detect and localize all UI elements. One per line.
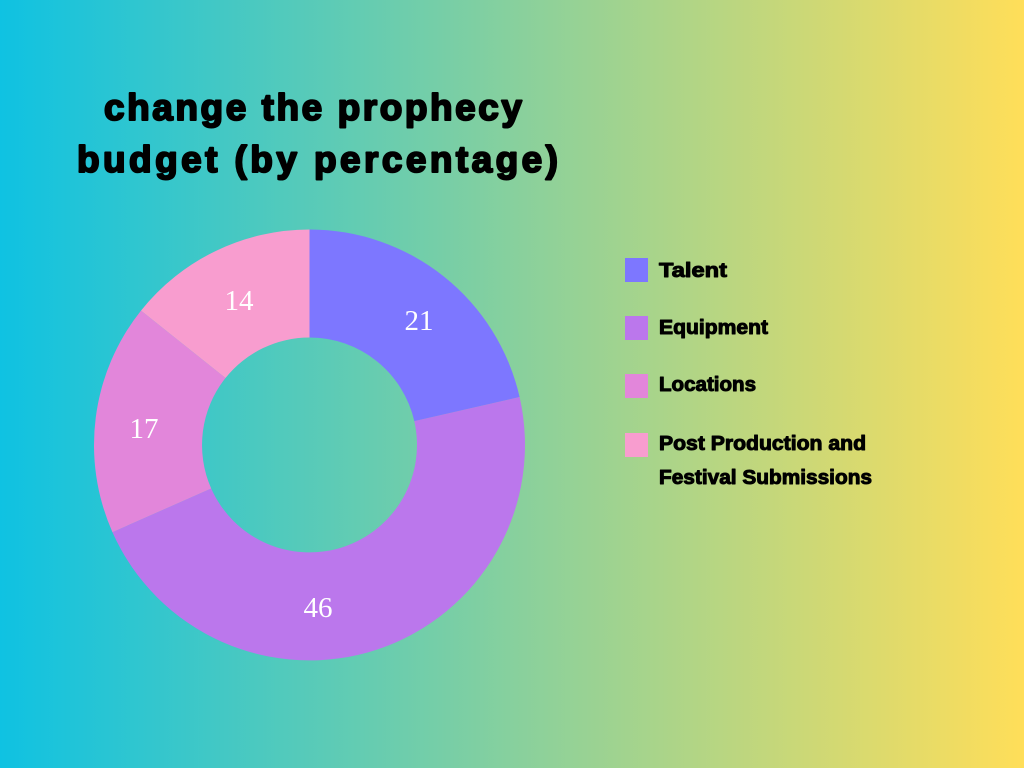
value: 14: 14 xyxy=(224,285,254,317)
value: 21: 21 xyxy=(404,305,434,337)
legend item: Post Production and Festival Submissions xyxy=(625,433,872,489)
title: change the prophecy xyxy=(104,87,522,128)
legend xyxy=(625,258,872,489)
legend item: Equipment xyxy=(625,316,768,340)
slice: Post Production 14 xyxy=(141,230,310,378)
legend item: Locations xyxy=(625,374,756,398)
legend item: Locations: Locations xyxy=(659,374,756,396)
donut chart xyxy=(94,230,525,660)
slice: Locations 17 xyxy=(94,311,226,532)
legend item: Post Production and Festival Submissions: Post Production and xyxy=(659,433,866,455)
legend item: Equipment: Equipment xyxy=(659,317,768,339)
title: budget (by percentage) xyxy=(77,139,558,180)
value: 46: 46 xyxy=(304,592,332,624)
slice: Equipment 46 xyxy=(112,397,525,660)
slice: Talent 21 xyxy=(310,230,520,421)
title xyxy=(77,87,558,180)
legend item: Post Production and Festival Submissions: Festival Submissions xyxy=(659,467,872,489)
legend item: Talent xyxy=(625,258,727,282)
legend item: Talent: Talent xyxy=(659,260,727,282)
value: 17: 17 xyxy=(130,413,158,445)
